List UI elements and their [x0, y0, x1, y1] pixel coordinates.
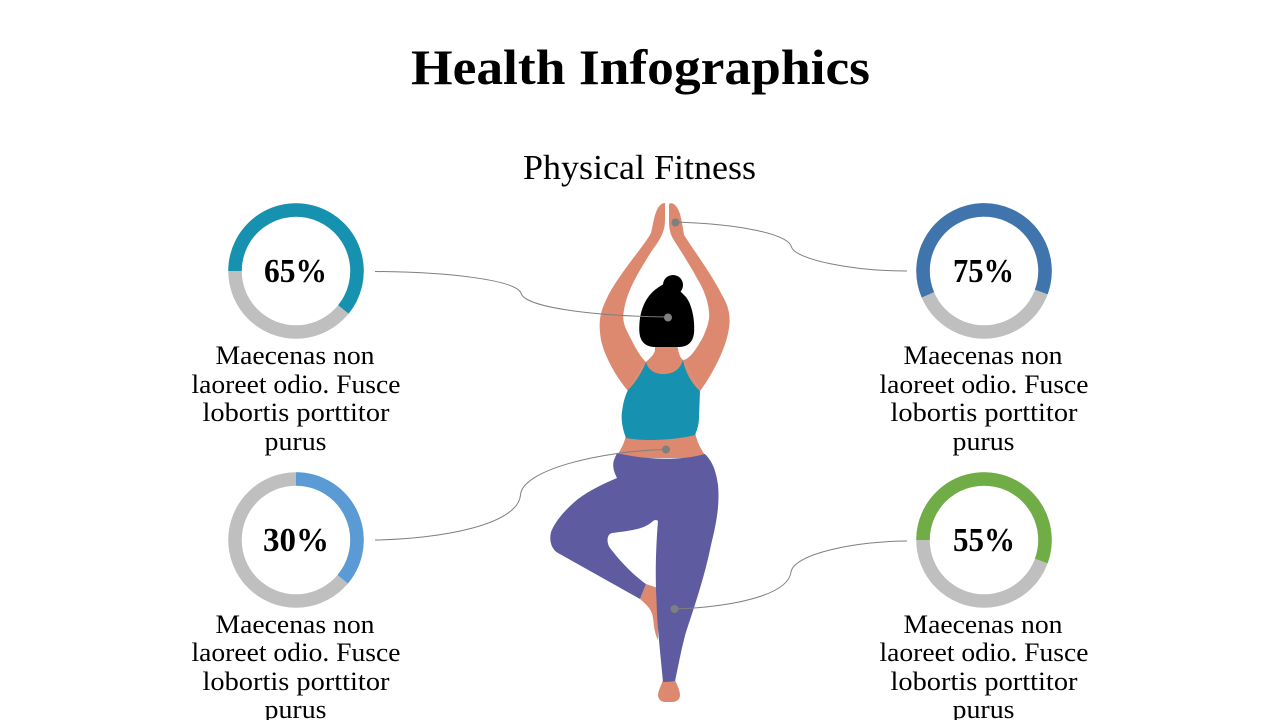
- text block: bottom right: laoreet odio. Fusce: [880, 638, 1088, 667]
- figure: right arm: [669, 203, 730, 391]
- subtitle: Physical Fitness: [523, 148, 756, 187]
- value: 55%: 55%: [953, 522, 1015, 559]
- donut: 75%: [923, 210, 1045, 332]
- figure: purple leggings: [550, 453, 719, 682]
- text block: top right: Maecenas non: [904, 341, 1062, 370]
- text block: bottom left: Maecenas non: [216, 610, 374, 639]
- connector: 55% to leg: [670, 541, 907, 613]
- text block: top left: purus: [264, 427, 326, 456]
- panel: 65% top left: [192, 210, 400, 456]
- figure: midriff: [616, 432, 707, 458]
- figure: standing foot: [658, 680, 680, 702]
- connector: 30% to waist: [375, 446, 670, 540]
- panel: 55% bottom right: [880, 479, 1088, 720]
- text block: top right: [880, 341, 1088, 456]
- panel: 30% bottom left: [192, 479, 400, 720]
- figure: neck and shoulders: [628, 342, 700, 391]
- figure: left arm: [600, 203, 665, 391]
- text block: top left: lobortis porttitor: [202, 398, 390, 427]
- text block: top right: laoreet odio. Fusce: [880, 370, 1088, 399]
- donut: 65%: [235, 210, 357, 332]
- figure: raised foot: [640, 584, 658, 640]
- text block: bottom left: [192, 610, 400, 720]
- donut: 30%: [235, 479, 357, 601]
- text block: top left: laoreet odio. Fusce: [192, 370, 400, 399]
- connector: 65% to head: [375, 272, 672, 322]
- text block: bottom left: laoreet odio. Fusce: [192, 638, 400, 667]
- text block: top left: [192, 341, 400, 456]
- text block: top left: Maecenas non: [216, 341, 374, 370]
- connector: 75% to hands: [672, 218, 907, 271]
- value: 65%: 65%: [264, 253, 327, 290]
- figure: hair: [639, 275, 694, 347]
- title: Health Infographics: [411, 39, 870, 95]
- panel: 75% top right: [880, 210, 1088, 456]
- value: 30%: 30%: [263, 522, 329, 559]
- figure: teal top: [622, 360, 700, 440]
- value: 75%: 75%: [953, 253, 1014, 290]
- text block: top right: lobortis porttitor: [890, 398, 1078, 427]
- yoga figure: [550, 203, 730, 702]
- donut: 55%: [923, 479, 1045, 601]
- text block: bottom right: Maecenas non: [904, 610, 1062, 639]
- text block: bottom left: lobortis porttitor: [202, 667, 390, 696]
- text block: top right: purus: [952, 427, 1014, 456]
- text block: bottom right: [880, 610, 1088, 720]
- text block: bottom right: lobortis porttitor: [890, 667, 1078, 696]
